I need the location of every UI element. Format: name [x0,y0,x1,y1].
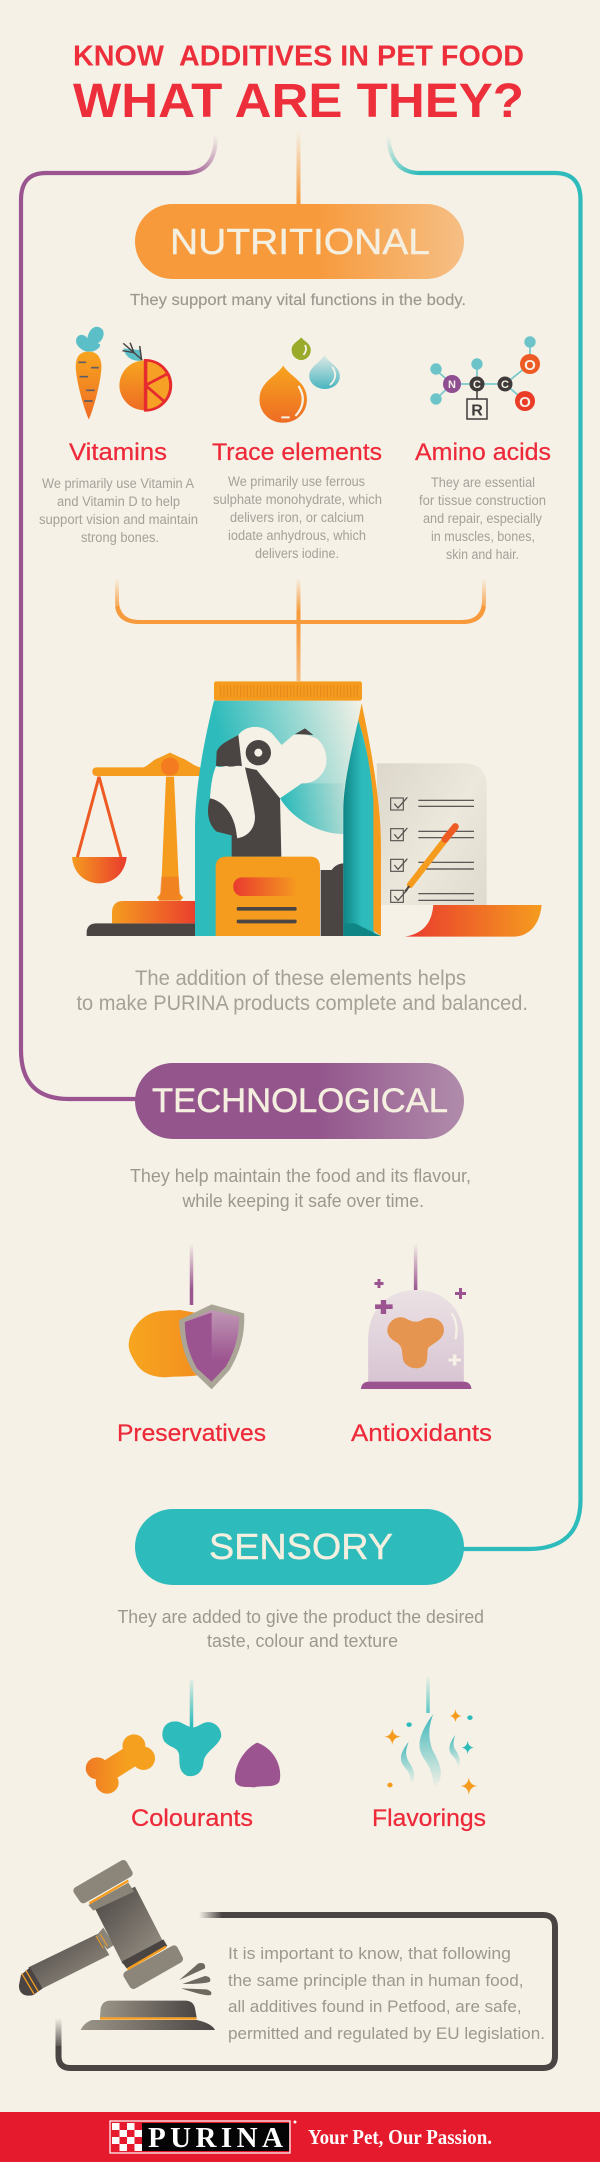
text: amino acids: for tissue construction [419,493,546,508]
icon: amino acid molecule: O [519,394,531,411]
text: addition of elements: The addition of these elements helps [135,967,466,990]
icon: flavorings smoke [384,1709,478,1795]
text: sensory intro [118,1607,484,1651]
text: vitamins [39,476,198,545]
text: addition of elements [76,967,528,1015]
icon: carrot and orange [76,327,171,419]
pill: sensory [135,1509,464,1585]
title: KNOW ADDITIVES IN PET FOOD [73,40,524,72]
label: colourants: Colourants [131,1805,253,1832]
text: trace elements: iodate anhydrous, which [228,528,366,543]
text: vitamins: support vision and maintain [39,512,198,527]
text: trace elements: sulphate monohydrate, which [213,492,382,507]
text: trace elements [213,474,382,561]
connectors: technological items [192,1243,416,1305]
icon: amino acid molecule: R [471,402,483,420]
icon: balance scale [72,753,200,936]
label: flavorings: Flavorings [372,1805,486,1832]
label: preservatives: Preservatives [117,1420,266,1447]
text: vitamins: strong bones. [81,530,159,545]
text: technological intro: They help maintain the food and its flavour, [130,1166,471,1186]
text: technological intro: while keeping it safe over time. [182,1191,424,1211]
pill: technological: TECHNOLOGICAL [152,1082,448,1120]
connectors: sensory items [192,1676,428,1728]
pill: sensory: SENSORY [209,1526,393,1567]
tagline: Your Pet, Our Passion. [308,2125,492,2149]
icon: preservatives shield [129,1304,244,1389]
icon: antioxidants dome [361,1279,471,1389]
text: amino acids [419,475,546,562]
text: trace elements: delivers iodine. [255,546,339,561]
illustration: scale, pet food bag, checklist [72,681,542,937]
icon: drops [259,337,340,423]
callout box: legal note: It is important to know, that following [228,1944,511,1963]
text: sensory intro: They are added to give the product the desired [118,1607,484,1627]
text: amino acids: They are essential [431,475,535,490]
text: addition of elements: to make PURINA products complete and balanced. [76,992,528,1015]
connector: orange bracket [117,578,484,681]
icon: amino acid molecule: C [501,379,509,391]
text: nutritional intro: They support many vital functions in the body. [130,292,466,309]
connector: technological purple line [21,135,216,1099]
callout box: legal note: the same principle than in human food, [228,1971,524,1990]
title [73,40,524,128]
text: amino acids: skin and hair. [446,547,519,562]
heading: trace elements: Trace elements [212,439,382,466]
pill: nutritional [135,204,464,279]
text: sensory intro: taste, colour and texture [207,1631,398,1651]
pill: technological [135,1063,464,1139]
logo: Purina: PURINA [148,2122,283,2154]
text: technological intro [130,1166,471,1211]
icon: colourants kibble [86,1721,280,1794]
icon: gavel [19,1864,215,2030]
icon: amino acid molecule: N [448,379,456,391]
heading: vitamins: Vitamins [69,439,167,466]
text: trace elements: We primarily use ferrous [228,474,365,489]
label: antioxidants: Antioxidants [351,1420,492,1447]
title: WHAT ARE THEY? [73,75,524,128]
text: vitamins: and Vitamin D to help [57,494,180,509]
icon: checklist [377,763,542,937]
text: vitamins: We primarily use Vitamin A [42,476,194,491]
text: amino acids: in muscles, bones, [431,529,535,544]
text: amino acids: and repair, especially [423,511,542,526]
callout box: legal note: all additives found in Petfood, are safe, [228,1997,522,2016]
icon: amino acid molecule [430,336,540,420]
icon: amino acid molecule: O [524,357,536,374]
callout box: legal note [58,1915,555,2068]
callout box: legal note: permitted and regulated by EU legislation. [228,2024,545,2043]
connector: sensory teal line [388,137,580,1549]
logo: Purina [110,2120,296,2154]
heading: amino acids: Amino acids [415,439,551,466]
text: trace elements: delivers iron, or calcium [230,510,364,525]
icon: food bag [195,681,381,936]
icon: amino acid molecule: C [473,379,481,391]
footer band [0,2112,600,2162]
connector: nutritional orange line [296,130,300,204]
pill: nutritional: NUTRITIONAL [170,221,430,262]
